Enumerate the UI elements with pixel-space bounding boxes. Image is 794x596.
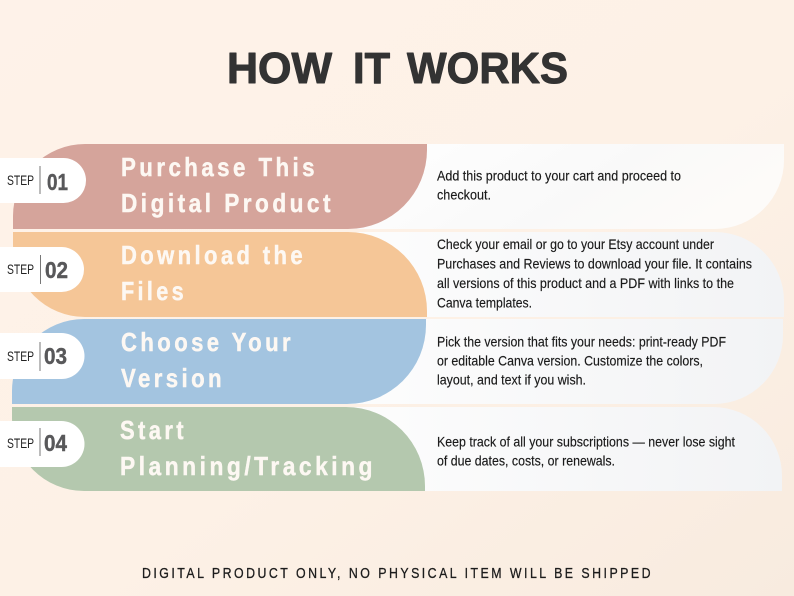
text: step 1 description bbox=[437, 168, 681, 202]
heading: step 3: Version bbox=[121, 363, 225, 393]
text: step 4 description: Keep track of all your subscriptions — never lose sight bbox=[437, 434, 735, 450]
title bbox=[227, 44, 568, 93]
text: step 4 description: of due dates, costs, or renewals. bbox=[437, 452, 615, 468]
badge: step 04: STEP bbox=[7, 435, 34, 451]
heading: step 3: Choose Your bbox=[121, 327, 294, 357]
text: step 2 description: Canva templates. bbox=[437, 294, 532, 310]
footer note: DIGITAL PRODUCT ONLY, NO PHYSICAL ITEM WILL BE SHIPPED bbox=[142, 565, 653, 582]
heading: step 3 bbox=[121, 327, 294, 393]
panel: step 1 heading band bbox=[13, 144, 427, 229]
title: IT bbox=[353, 44, 390, 93]
title: WORKS bbox=[407, 44, 568, 93]
badge: step 03: 03 bbox=[44, 343, 67, 369]
text: step 1 description: checkout. bbox=[437, 186, 491, 202]
badge: step 01 bbox=[0, 158, 86, 203]
text: step 2 description: Check your email or go to your Etsy account under bbox=[437, 236, 714, 252]
badge: step 04 bbox=[0, 421, 84, 467]
text: step 3 description: layout, and text if you wish. bbox=[437, 372, 586, 388]
panel: step 2 heading band bbox=[13, 232, 427, 317]
text: step 3 description bbox=[437, 334, 726, 388]
heading: step 1: Digital Product bbox=[121, 188, 334, 218]
title: HOW bbox=[227, 44, 332, 93]
badge: step 01: STEP bbox=[7, 172, 34, 188]
panel: step 4 heading band bbox=[12, 407, 425, 491]
panel: step 3 description bbox=[340, 319, 783, 404]
badge: step 03 bbox=[0, 333, 84, 379]
heading: step 4 bbox=[120, 415, 376, 481]
text: step 3 description: or editable Canva version. Customize the colors, bbox=[437, 352, 703, 368]
heading: step 4: Start bbox=[120, 415, 187, 445]
heading: step 4: Planning/Tracking bbox=[120, 451, 376, 481]
heading: step 2 bbox=[121, 240, 306, 306]
badge: step 02: 02 bbox=[45, 257, 68, 283]
panel: step 4 description bbox=[340, 407, 782, 491]
text: step 2 description: all versions of this product and a PDF with links to the bbox=[437, 275, 734, 291]
panel: step 3 heading band bbox=[12, 319, 426, 404]
text: step 2 description bbox=[437, 236, 752, 310]
badge: step 03: STEP bbox=[7, 348, 34, 364]
text: step 4 description bbox=[437, 434, 735, 468]
text: step 3 description: Pick the version that fits your needs: print-ready PDF bbox=[437, 334, 726, 350]
badge: step 04: 04 bbox=[44, 430, 67, 456]
panel: step 2 description bbox=[340, 232, 784, 317]
heading: step 1: Purchase This bbox=[121, 152, 318, 182]
heading: step 1 bbox=[121, 152, 334, 218]
panel: step 1 description bbox=[340, 144, 784, 229]
text: step 2 description: Purchases and Reviews to download your file. It contains bbox=[437, 256, 752, 272]
heading: step 2: Files bbox=[121, 276, 187, 306]
text: step 1 description: Add this product to your cart and proceed to bbox=[437, 168, 681, 184]
badge: step 02: STEP bbox=[7, 261, 34, 277]
heading: step 2: Download the bbox=[121, 240, 306, 270]
badge: step 02 bbox=[0, 247, 84, 292]
badge: step 01: 01 bbox=[47, 169, 68, 195]
